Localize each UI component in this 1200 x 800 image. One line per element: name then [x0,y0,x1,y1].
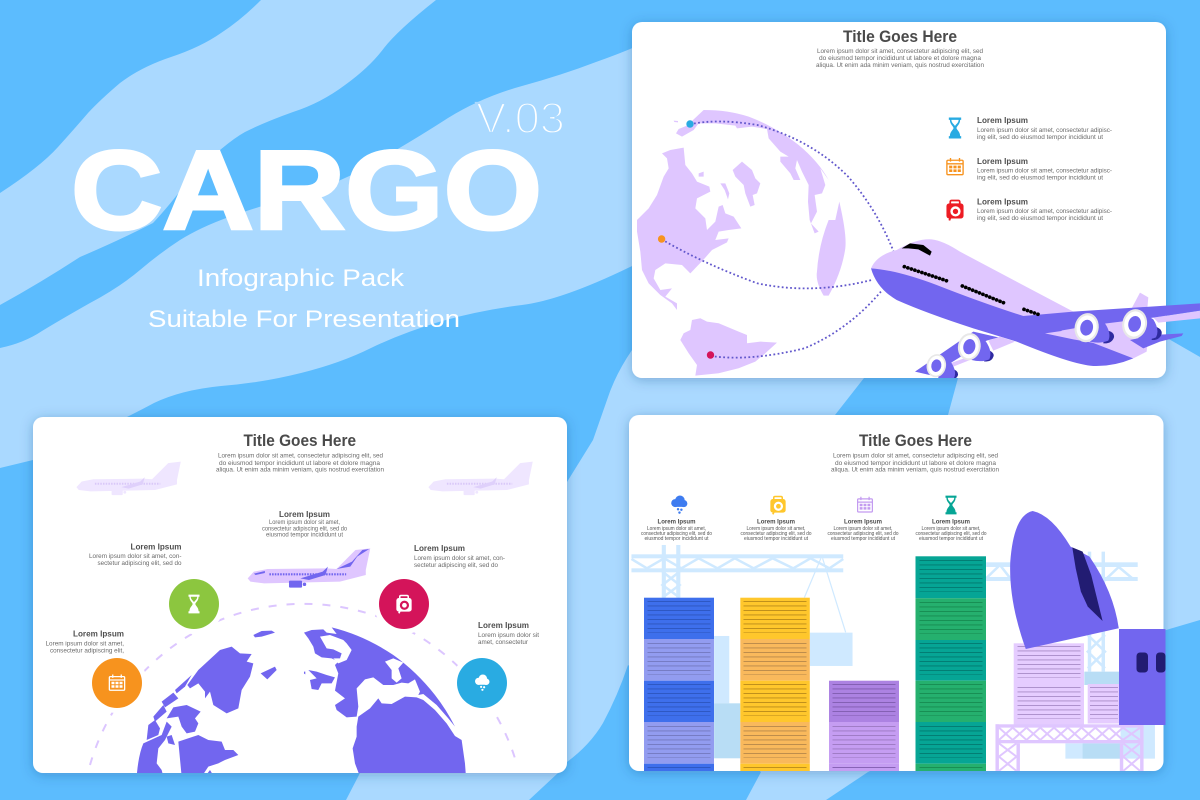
label: top center: consectetur adipiscing elit, sed do [262,526,348,532]
subtitle: Infographic Pack: Infographic Pack [197,265,405,292]
dashed arc [90,604,517,765]
label 1: Lorem Ipsum [658,519,696,526]
label 2: Lorem ipsum dolor sit amet, [746,526,806,532]
route markers [658,120,714,359]
description: do eiusmod tempor incididunt ut labore et dolore magna [835,460,997,467]
label 3 [828,519,899,542]
legend item 1: Lorem Ipsum [977,116,1028,125]
engine 3 [958,333,994,362]
label 1: eiusmod tempor incididunt ut [644,536,709,542]
container stack: purple [829,681,899,772]
description: do eiusmod tempor incididunt ut labore et dolore magna [819,55,982,62]
label: upper right: Lorem ipsum dolor sit amet, con- [414,555,505,562]
label 3: consectetur adipiscing elit, sed do [828,531,899,537]
label: lower left [46,630,124,654]
icon: calendar [947,158,963,175]
blue circle with cloud [452,653,512,713]
label: upper left: Lorem Ipsum [130,543,182,552]
description: aliqua. Ut enim ada minim veniam, quis nostrud exercitation [831,467,1000,474]
container stack: yellow [740,598,810,772]
label: lower right [478,621,539,646]
label: lower left: Lorem ipsum dolor sit amet, [46,641,124,648]
legend item 3: Lorem ipsum dolor sit amet, consectetur adipisc- [977,208,1112,215]
legend item 1: Lorem ipsum dolor sit amet, consectetur adipisc- [977,127,1112,134]
label: upper left: sectetur adipiscing elit, sed do [98,560,182,567]
label: lower right: amet, consectetur [478,639,528,646]
container stack: lilac [1014,643,1121,725]
heading: Title Goes Here [843,28,957,46]
icon: hourglass [945,496,957,514]
description: Lorem ipsum dolor sit amet, consectetur adipiscing elit, sed [833,453,999,460]
description: do eiusmod tempor incididunt ut labore et dolore magna [219,460,381,467]
passenger windows [904,267,1040,315]
faded plane left [76,462,181,495]
label: upper right: Lorem Ipsum [414,544,465,553]
description: Lorem ipsum dolor sit amet, consectetur adipiscing elit, sed [218,453,384,460]
label 2: consectetur adipiscing elit, sed do [740,531,812,537]
label 4: eiusmod tempor incididunt ut [919,536,984,542]
label 3: eiusmod tempor incididunt ut [831,536,896,542]
legend item 2: Lorem Ipsum [977,157,1028,166]
cargo plane nose [1010,511,1119,649]
icon: camera [770,496,786,514]
label: lower left: consectetur adipiscing elit, [50,648,124,654]
label 4: Lorem Ipsum [932,519,970,526]
label: upper left [89,543,182,567]
engine 4 [926,354,958,378]
label: top center: eiusmod tempor incididunt ut [266,532,343,538]
lilac truss [995,724,1144,774]
label: top center: Lorem ipsum dolor sit amet, [269,519,340,526]
main title: CARGO: CARGO [71,128,542,253]
legend item 3: ing elit, sed do eiusmod tempor incididunt ut [977,215,1103,222]
legend item 3 [977,198,1112,222]
red circle with camera [374,574,434,634]
description: Lorem ipsum dolor sit amet, consectetur adipiscing elit, sed [817,48,984,55]
cockpit window [902,243,932,256]
cargo plane fuselage [1119,629,1166,725]
panel: containers [629,415,1166,774]
legend item 1: ing elit, sed do eiusmod tempor incididunt ut [977,134,1103,141]
engine 2 [1122,309,1162,340]
description: aliqua. Ut enim ada minim veniam, quis nostrud exercitation [816,62,985,69]
crane scenery [631,545,1155,759]
heading: Title Goes Here [244,432,356,450]
label 1: consectetur adipiscing elit, sed do [641,531,712,537]
orange circle with calendar [87,653,147,713]
engine 1 [1074,313,1114,344]
faded plane right [428,462,533,495]
label 2 [740,519,812,542]
label: upper left: Lorem ipsum dolor sit amet, con- [89,553,182,560]
globe [137,627,466,777]
legend item 2: ing elit, sed do eiusmod tempor incididunt ut [977,174,1103,182]
world map [637,110,846,376]
legend item 3: Lorem Ipsum [977,198,1028,206]
label 1: Lorem ipsum dolor sit amet, [647,526,706,532]
legend item 1 [977,116,1112,141]
subtitle: Suitable For Presentation: Suitable For Presentation [148,306,460,333]
legend item 2: Lorem ipsum dolor sit amet, consectetur adipisc- [977,168,1112,174]
icon: camera [946,200,964,220]
label 3: Lorem ipsum dolor sit amet, [834,526,892,532]
description [216,453,385,474]
description [816,48,985,69]
icon: hourglass [949,118,961,138]
label: upper right [414,544,505,569]
label: top center: Lorem Ipsum [279,510,330,519]
label 2: Lorem Ipsum [757,519,795,526]
container stack: blue [644,598,714,772]
label: lower right: Lorem Ipsum [478,621,529,630]
label 4: Lorem ipsum dolor sit amet, [922,526,980,532]
heading: Title Goes Here [859,432,972,450]
version label: V.03 [476,94,565,143]
legend [946,116,1112,222]
label 4 [916,519,987,542]
legend item 2 [977,157,1112,182]
label: lower left: Lorem Ipsum [73,630,124,639]
container stack: green [916,556,986,772]
label: upper right: sectetur adipiscing elit, sed do [414,562,499,569]
label 2: eiusmod tempor incididunt ut [744,536,809,542]
label 3: Lorem Ipsum [844,519,882,526]
large airplane [871,239,1200,380]
label 1 [641,519,712,542]
panel: world routes [632,22,1166,378]
dotted routes [662,121,894,358]
icon: cloud [671,496,687,514]
icon: calendar [858,497,872,512]
panel: globe arc [33,417,567,777]
center plane [238,545,374,593]
description [831,453,1000,474]
description: aliqua. Ut enim ada minim veniam, quis nostrud exercitation [216,467,385,474]
green circle with hourglass [164,574,224,634]
label 4: consectetur adipiscing elit, sed do [916,531,987,537]
label: top center [262,510,348,538]
label: lower right: Lorem ipsum dolor sit [478,632,539,639]
